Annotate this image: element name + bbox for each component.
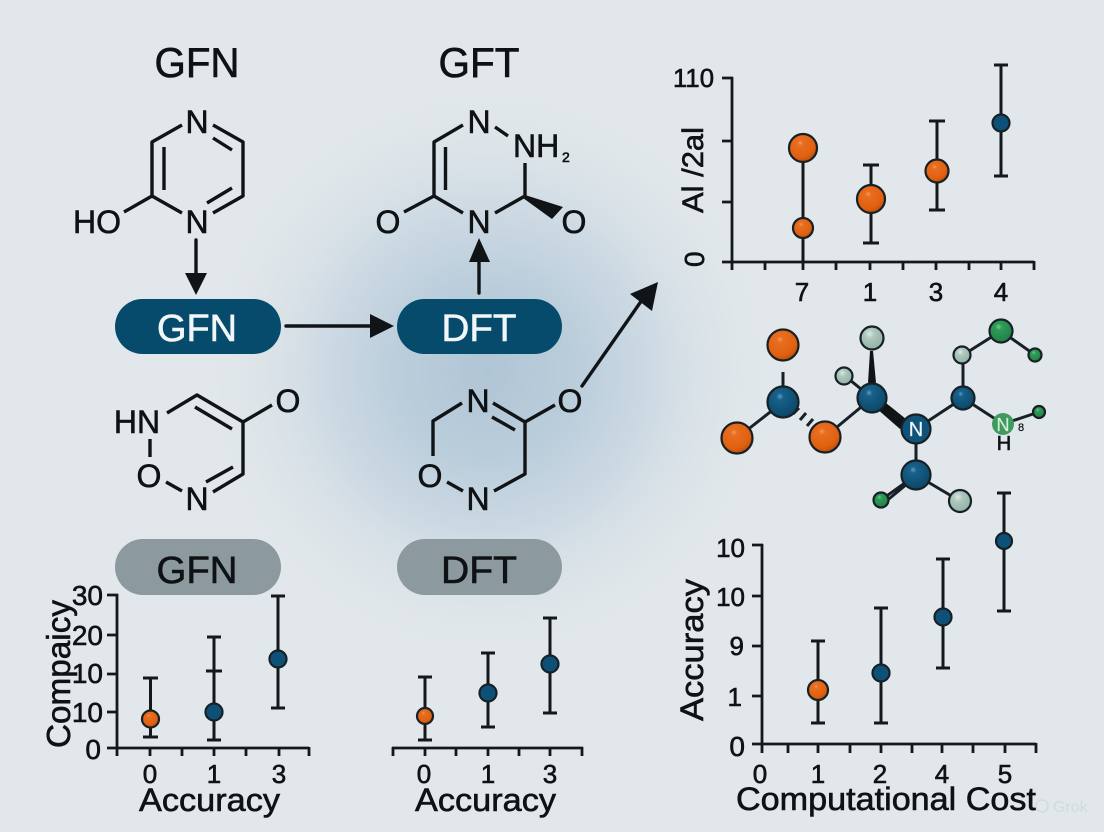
molecule: ball and stick: H [997, 433, 1011, 455]
molecule: middle left: N [185, 481, 209, 517]
chart: top right: Al /2al [677, 127, 710, 213]
chart: bottom right: 10 [716, 533, 745, 563]
chart: bottom left: 0 [85, 734, 101, 765]
heading: GFN: GFN [154, 39, 240, 86]
molecule: ball and stick: N [909, 419, 923, 441]
chart: bottom centre: 1 [481, 759, 495, 789]
molecule: top centre: N [467, 204, 491, 240]
chart: bottom right: 5 [998, 759, 1012, 789]
chart: bottom right: Computational Cost [736, 781, 1036, 817]
chart: bottom left: Compaicy [40, 600, 77, 748]
molecule: middle centre [418, 383, 582, 517]
arrow: diagonal to chart [582, 282, 658, 386]
chart: bottom left: 30 [72, 580, 103, 611]
chart: bottom left [40, 580, 309, 818]
molecule: top left: HO [73, 204, 121, 240]
molecule: top left: N [185, 204, 209, 240]
pill: GFN [115, 299, 281, 354]
molecule: middle centre: N [466, 383, 490, 419]
chart: top right: 7 [795, 277, 809, 307]
pill: DFT grey: DFT [441, 550, 517, 592]
arrow: down to GFN [185, 240, 207, 295]
chart: bottom left: 0 [143, 759, 157, 789]
watermark: Grok [1053, 799, 1089, 816]
chart: bottom left: 1 [207, 759, 221, 789]
arrow: DFT up to molecule [469, 238, 490, 293]
chart: bottom right: 1 [811, 759, 825, 789]
chart: top right [673, 63, 1034, 307]
chart: bottom centre: 3 [543, 759, 557, 789]
molecule: top centre: NH [513, 128, 559, 164]
pill: DFT grey [397, 539, 562, 595]
chart: top right: 0 [679, 251, 710, 267]
chart: bottom right: 0 [729, 731, 745, 762]
molecule: middle left: O [137, 458, 161, 494]
chart: bottom left: 10 [72, 697, 103, 728]
chart: bottom right: 1 [728, 682, 742, 712]
chart: top right: 110 [673, 63, 714, 93]
molecule: ball and stick: 8 [1018, 422, 1024, 434]
chart: bottom right: Accuracy [674, 579, 710, 721]
molecule: top centre: N [467, 104, 491, 140]
molecule: middle centre: O [558, 383, 582, 419]
chart: top right: 4 [994, 277, 1008, 307]
chart: bottom centre [392, 618, 583, 818]
chart: bottom right: 10 [716, 582, 745, 612]
molecule: ball and stick: N [996, 415, 1010, 435]
watermark [1036, 799, 1089, 816]
molecule: middle centre: N [466, 481, 490, 517]
chart: bottom left: 20 [72, 620, 103, 651]
molecule: top left: N [185, 104, 209, 140]
molecule: top centre: 2 [562, 149, 570, 165]
pill: GFN: GFN [157, 308, 237, 350]
molecule: top centre: O [562, 204, 586, 240]
molecule: top centre [376, 104, 586, 240]
chart: bottom right [674, 493, 1036, 817]
molecule: middle centre: O [418, 458, 442, 494]
molecule: top left [73, 104, 243, 240]
chart: bottom right: 9 [730, 631, 744, 661]
chart: bottom left: 10 [72, 658, 103, 689]
chart: bottom left: 3 [272, 759, 286, 789]
chart: bottom left: Accuracy [139, 782, 280, 818]
pill: GFN grey [115, 539, 281, 595]
molecule: middle left [114, 383, 300, 517]
molecule: ball and stick [722, 320, 1045, 512]
pill: DFT [397, 299, 562, 354]
chart: bottom right: 2 [873, 759, 887, 789]
pill: DFT: DFT [442, 308, 516, 350]
chart: top right: 3 [929, 277, 943, 307]
chart: top right: 1 [863, 277, 877, 307]
chart: bottom centre: 0 [417, 759, 431, 789]
chart: bottom right: 0 [753, 759, 767, 789]
pill: GFN grey: GFN [156, 550, 238, 592]
molecule: top centre: O [376, 204, 400, 240]
molecule: middle left: HN [114, 404, 160, 440]
molecule: middle left: O [276, 383, 300, 419]
heading: GFT: GFT [438, 39, 520, 86]
chart: bottom centre: Accuracy [415, 782, 556, 818]
arrow: GFN to DFT [286, 314, 394, 338]
chart: bottom right: 4 [935, 759, 949, 789]
